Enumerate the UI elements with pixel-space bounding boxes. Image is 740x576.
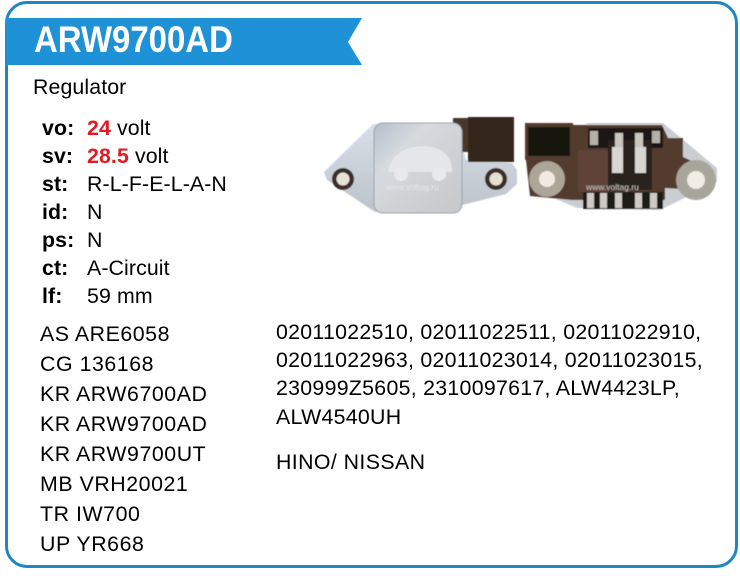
part number list [276,320,703,429]
icon: regulator front photo: www.voltag.ru [385,182,439,192]
specification list: 28.5 volt [87,144,169,168]
subtitle: Regulator: Regulator [33,75,126,99]
cross-reference list: KR ARW9700UT [40,442,206,466]
vehicle makes: HINO/ NISSAN [276,450,425,474]
part number list: ALW4540UH [276,405,401,429]
cross-reference list: KR ARW6700AD [40,382,207,406]
cross-reference list: CG 136168 [40,352,154,376]
specification list: 24 volt [87,116,151,140]
specification list: vo: [42,116,74,140]
specification list: st: [42,172,68,196]
specification list: A-Circuit [87,256,170,280]
specification list: lf: [42,284,62,308]
cross-reference list: KR ARW9700AD [40,412,207,436]
specification list: R-L-F-E-L-A-N [87,172,227,196]
icon: regulator rear photo [524,122,718,210]
title: ARW9700AD [34,19,233,60]
banner: product code [6,18,362,65]
cross-reference list [40,322,207,556]
cross-reference list: TR IW700 [40,502,140,526]
part number list: 02011022510, 02011022511, 02011022910, [276,320,701,344]
cross-reference list: UP YR668 [40,532,144,556]
specification list [42,116,227,308]
specification list: 59 mm [87,284,153,308]
specification list: id: [42,200,68,224]
part number list: 02011022963, 02011023014, 02011023015, [276,348,703,372]
specification list: sv: [42,144,73,168]
icon: regulator front photo [324,116,518,214]
specification list: N [87,228,103,252]
specification list: ps: [42,228,74,252]
cross-reference list: AS ARE6058 [40,322,170,346]
part number list: 230999Z5605, 2310097617, ALW4423LP, [276,376,680,400]
specification list: ct: [42,256,68,280]
icon: regulator rear photo: www.voltag.ru [585,182,639,192]
specification list: N [87,200,103,224]
cross-reference list: MB VRH20021 [40,472,188,496]
